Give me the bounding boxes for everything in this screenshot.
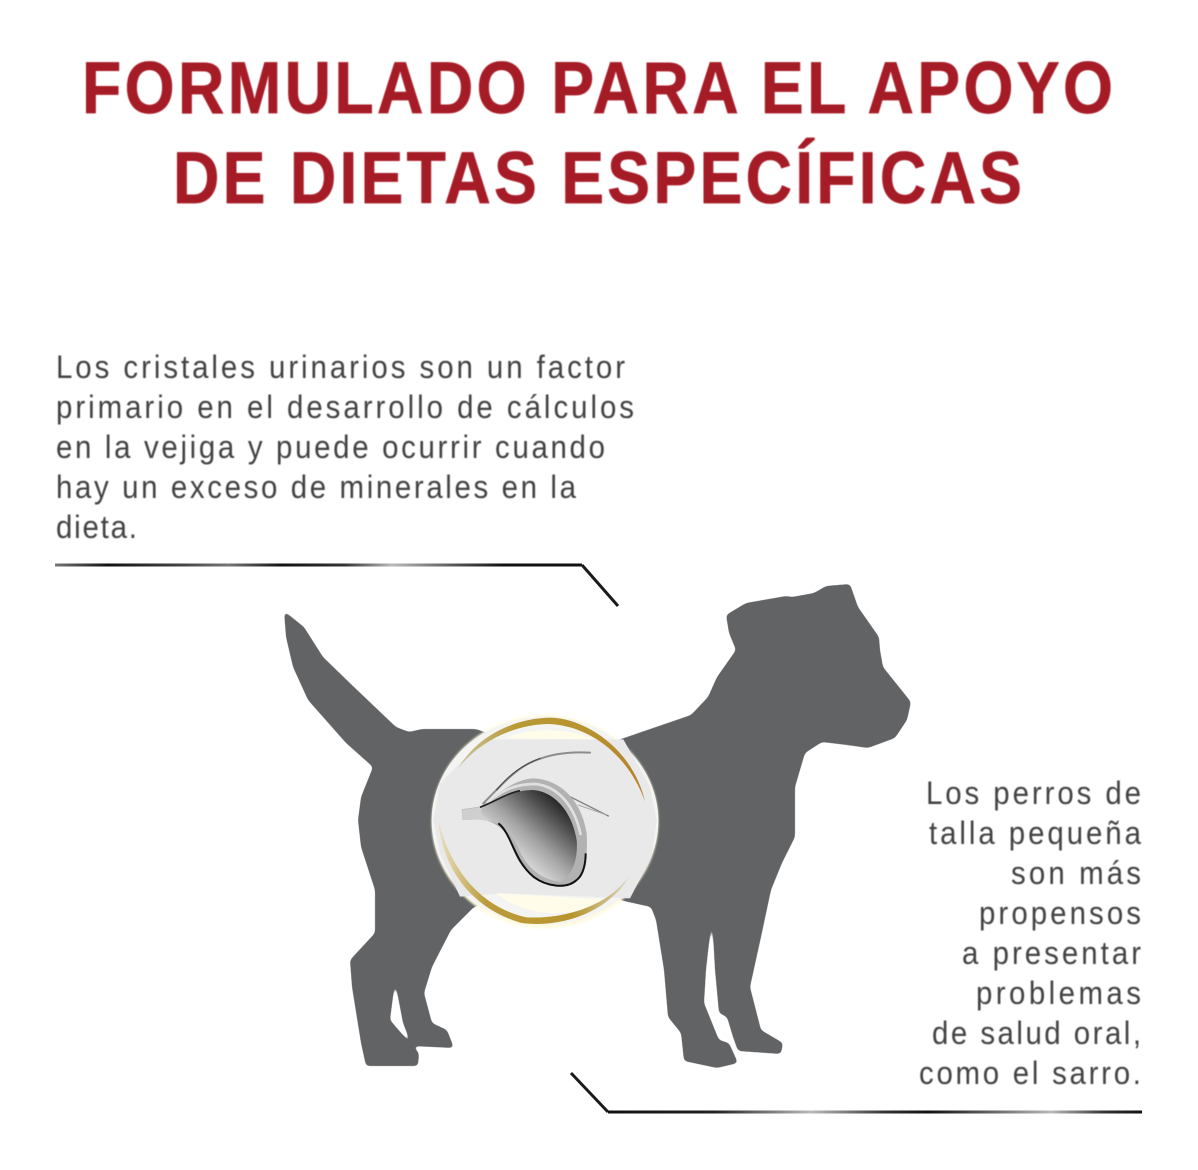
text block: urinary crystals: primario en el desarrollo de cálculos [56, 389, 634, 425]
text block: small dogs: Los perros de [926, 775, 1141, 811]
text block: small dogs [919, 775, 1142, 1091]
text block: small dogs: a presentar [962, 935, 1141, 971]
text block: urinary crystals: en la vejiga y puede ocurrir cuando [56, 429, 605, 465]
bladder outline [498, 823, 586, 886]
badge cream highlights [497, 730, 610, 913]
badge inner panel [433, 739, 657, 898]
title: DE DIETAS ESPECÍFICAS [173, 137, 1022, 219]
bladder top edge [480, 791, 520, 807]
bladder badge [432, 715, 658, 928]
text block: small dogs: son más [1011, 855, 1141, 891]
text block: small dogs: de salud oral, [932, 1015, 1141, 1051]
callout line: top [55, 565, 618, 606]
text block: urinary crystals: Los cristales urinarios son un factor [56, 349, 625, 385]
text block: small dogs: problemas [976, 975, 1141, 1011]
text block: small dogs: talla pequeña [929, 815, 1142, 851]
bladder neck [462, 807, 492, 821]
title: FORMULADO PARA EL APOYO [82, 47, 1113, 129]
bladder body [462, 790, 577, 882]
dog silhouette [284, 584, 911, 1068]
text block: urinary crystals: hay un exceso de minerales en la [56, 469, 577, 505]
bladder strands [483, 752, 608, 816]
text block: urinary crystals [56, 349, 634, 545]
badge glow [432, 715, 658, 928]
gold ring arcs [438, 718, 645, 924]
badge disc [432, 717, 658, 925]
bladder wall [462, 778, 587, 885]
text block: urinary crystals: dieta. [56, 509, 137, 545]
callout line: bottom [571, 1073, 1142, 1112]
title [82, 47, 1113, 219]
bladder inner ring [487, 784, 581, 835]
bladder illustration [462, 752, 608, 886]
text block: small dogs: como el sarro. [919, 1055, 1141, 1091]
text block: small dogs: propensos [979, 895, 1141, 931]
